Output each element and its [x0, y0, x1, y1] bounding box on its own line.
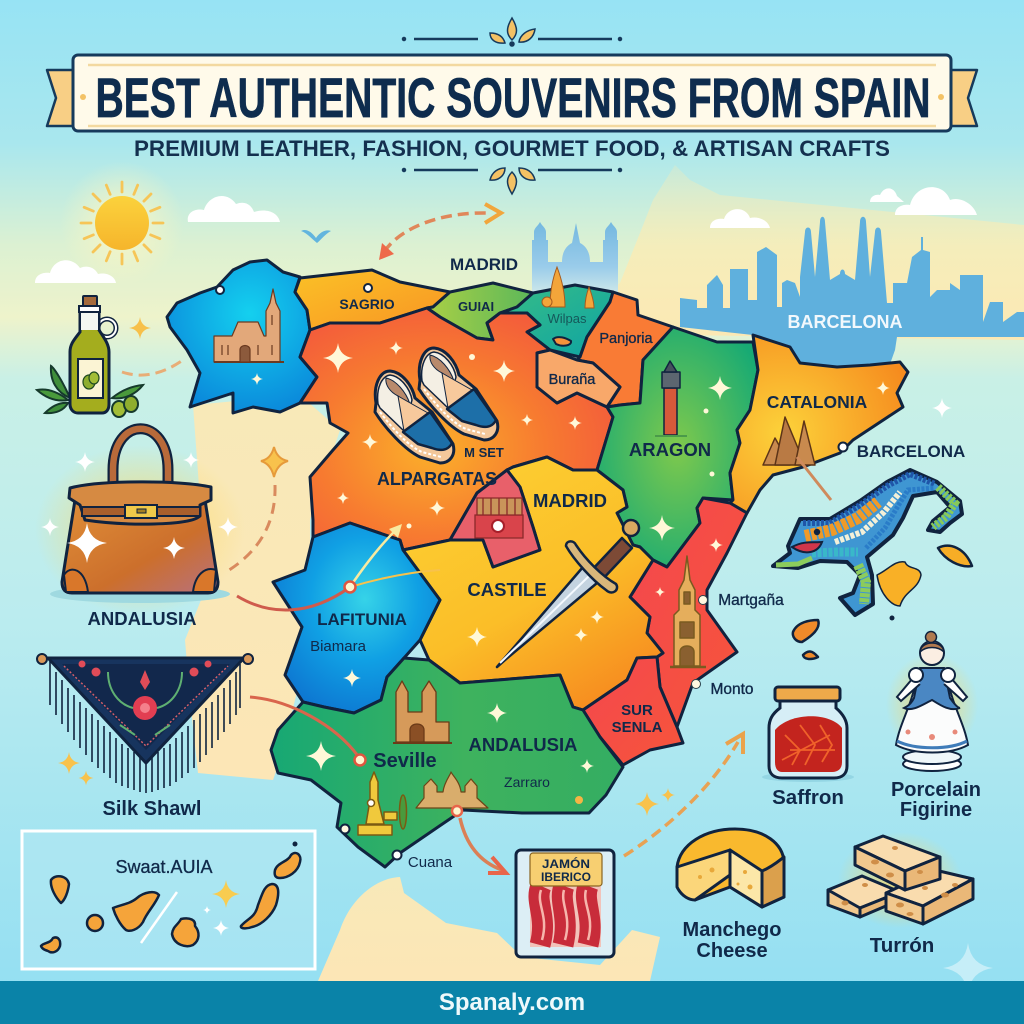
icon: porcelain figurine: [886, 632, 978, 771]
land: sand backdrop: [185, 165, 1024, 981]
map labels: Buraña: [549, 372, 596, 388]
region: Lafitunia: [273, 523, 440, 713]
top block: [855, 836, 940, 871]
arrow: shawl to Seville: [250, 697, 366, 766]
icon: jamon iberico pack: JAMÓN: [542, 858, 590, 871]
handle: [98, 319, 116, 337]
region: Galicia: [167, 260, 317, 413]
sparkles: [41, 452, 238, 563]
label: Andalusia handbag: ANDALUSIA: [88, 608, 196, 629]
handle: [113, 429, 168, 500]
arrow: Andalusia to Jamon: [452, 806, 506, 873]
islands: [41, 853, 300, 952]
icon: jamon iberico pack: IBERICO: [541, 872, 591, 884]
icon: sun: [60, 161, 184, 285]
label: Turron: Turrón: [870, 934, 934, 957]
map labels: GUIAI: [458, 299, 494, 314]
clouds: [35, 187, 977, 283]
map of Spain: [167, 260, 908, 867]
arrow: Catalonia to lizard: [797, 457, 831, 500]
left block: [828, 876, 900, 908]
label: [78, 359, 103, 398]
ornament: bottom: [403, 168, 621, 194]
right block: [886, 870, 973, 906]
lizard body outline: [773, 470, 962, 615]
bottle: [70, 310, 109, 413]
small islet dot: [890, 616, 894, 620]
icon: jamon iberico pack: [516, 850, 614, 957]
arms: [897, 672, 967, 701]
flap: [69, 482, 211, 524]
icon: espadrille back: [419, 348, 498, 440]
icon: turron blocks: [828, 832, 973, 928]
green back leg: [858, 565, 866, 604]
map labels: ANDALUSIA: [469, 734, 577, 755]
icon: saffron jar: [762, 687, 854, 782]
icon: Manchego cheese: [677, 829, 784, 907]
map labels: ARAGON: [629, 439, 711, 460]
region: Aragon: [597, 327, 758, 567]
map labels: SAGRIO: [339, 296, 395, 312]
title banner: [47, 55, 977, 131]
arrow: dashed to saffron: [624, 734, 743, 856]
mosaic: orange band: [805, 502, 878, 536]
map labels: Biamara: [310, 638, 367, 655]
map markers: [216, 284, 848, 860]
island: Menorca: [938, 546, 972, 566]
icon: Seville church: [393, 681, 452, 743]
base: [903, 757, 961, 771]
strap and lock: [82, 507, 200, 516]
map labels: Seville: [373, 750, 437, 772]
eye: [814, 529, 820, 535]
icon: Catalonia mountains: [763, 417, 815, 465]
map labels: Wilpas: [547, 311, 587, 326]
leaves and olives: [37, 366, 143, 417]
pack label: [530, 853, 602, 886]
map labels: Panjoria: [599, 331, 654, 347]
region: Wilpas: [500, 285, 613, 357]
green front foot: [776, 558, 812, 565]
small island in Wilpas: [553, 337, 571, 346]
map labels: MADRID: [450, 255, 518, 274]
floral: [133, 696, 157, 720]
region: Panjoria: [577, 292, 673, 407]
region: Catalonia: [730, 335, 908, 513]
icon: Aragon tower: [655, 361, 687, 436]
arrow: dashed double arrow: [379, 204, 501, 260]
mosaic: blue back band: [803, 474, 935, 523]
icon: Lizard mosaic: [773, 470, 962, 615]
skyline: Barcelona: [680, 217, 1024, 367]
region: Castile north: [300, 308, 613, 550]
label: Porcelain Figirine: Figirine: [900, 799, 972, 821]
map labels: LAFITUNIA: [317, 610, 407, 629]
icon: Andalusia cathedral: [416, 772, 488, 808]
banner plate: [73, 55, 951, 131]
region: Valencia: [630, 498, 747, 727]
sparkles: gold near arrow: [635, 788, 675, 816]
map labels: Zarraro: [504, 774, 550, 790]
label: Manchego Cheese: [683, 919, 781, 962]
region: Sagrio: [295, 270, 450, 330]
icon: Galicia church: [214, 289, 284, 362]
map labels: BARCELONA: [857, 442, 965, 461]
label: Porcelain Figirine: Porcelain: [891, 779, 981, 801]
mosaic: teal chest: [812, 552, 858, 553]
map labels: CATALONIA: [767, 392, 868, 412]
sparkle: gold near oil: [129, 317, 151, 339]
map labels: [310, 255, 965, 871]
label: Barcelona skyline: BARCELONA: [788, 312, 902, 332]
region: Castile and Madrid: [403, 457, 663, 710]
icon: olive oil bottle: [37, 296, 143, 417]
footer: Spanaly.com: [439, 989, 585, 1016]
icon: Valencia tower: [670, 556, 706, 667]
mouth: [792, 542, 822, 552]
map labels: MADRID: [533, 490, 607, 511]
fringe: [50, 660, 240, 793]
region: Madrid centre: [450, 470, 540, 567]
icon: yellow Giralda: [358, 772, 406, 835]
label: Porcelain Figirine: [891, 779, 981, 821]
rod knobs: [37, 654, 47, 664]
meat: [530, 884, 601, 947]
label: Manchego Cheese: Manchego: [683, 919, 781, 941]
mosaic: blue lower band: [866, 488, 935, 548]
icon: bird: [301, 230, 331, 243]
region: Andalusia: [271, 658, 623, 867]
mosaic: green tail: [933, 487, 955, 527]
map labels: Monto: [710, 681, 754, 698]
icon: Madrid monument: [475, 498, 523, 538]
map labels: CASTILE: [467, 579, 547, 600]
icon: silk shawl: [37, 654, 253, 793]
mosaic: cream band: [835, 492, 900, 542]
panel: Canary Islands inset: [22, 831, 315, 969]
icon: gold star with dashed path: [226, 447, 288, 572]
label: Silk Shawl: Silk Shawl: [103, 798, 201, 820]
subtitle: PREMIUM LEATHER, FASHION, GOURMET FOOD, & ARTISAN CRAFTS: [134, 136, 890, 161]
icon: dagger: [497, 520, 639, 667]
icon: leather handbag: [35, 429, 245, 615]
label: Saffron: Saffron: [772, 786, 844, 809]
arrow: oil to Galicia: [122, 360, 183, 375]
banner trim: [80, 65, 944, 126]
skyline: Madrid cathedral silhouette: [532, 222, 618, 297]
label: Manchego Cheese: Cheese: [696, 940, 768, 962]
island: Mallorca: [877, 562, 921, 606]
region: Burana: [537, 350, 620, 407]
sparkles: gold near shawl: [58, 752, 94, 786]
map labels: SENLA: [612, 719, 663, 736]
head: [920, 641, 944, 665]
skirt: [896, 680, 968, 752]
map labels: ALPARGATAS: [377, 469, 497, 489]
sparkles on map: [251, 341, 890, 773]
sparkles: right side: [932, 398, 993, 993]
dress: [904, 668, 960, 709]
body: [62, 500, 218, 593]
region: Guiai: [427, 283, 533, 340]
icon: espadrille front: [375, 371, 454, 463]
map labels: Martgaña: [718, 592, 784, 609]
islands: Ibiza and Formentera: [793, 620, 819, 659]
map labels: M SET: [464, 445, 504, 460]
icon: Wilpas spires: [542, 267, 594, 308]
inset label: Swaat.AUIA: [115, 857, 213, 877]
footer: [0, 981, 1024, 1024]
region: Sur Senla: [583, 657, 683, 765]
map labels: SUR: [621, 702, 653, 719]
cloth: [48, 658, 244, 763]
map labels: Cuana: [408, 854, 453, 871]
arrow: bag to Lafitunia: [237, 524, 440, 610]
ribbon tails: [47, 70, 977, 126]
ornament: top: [403, 18, 621, 46]
